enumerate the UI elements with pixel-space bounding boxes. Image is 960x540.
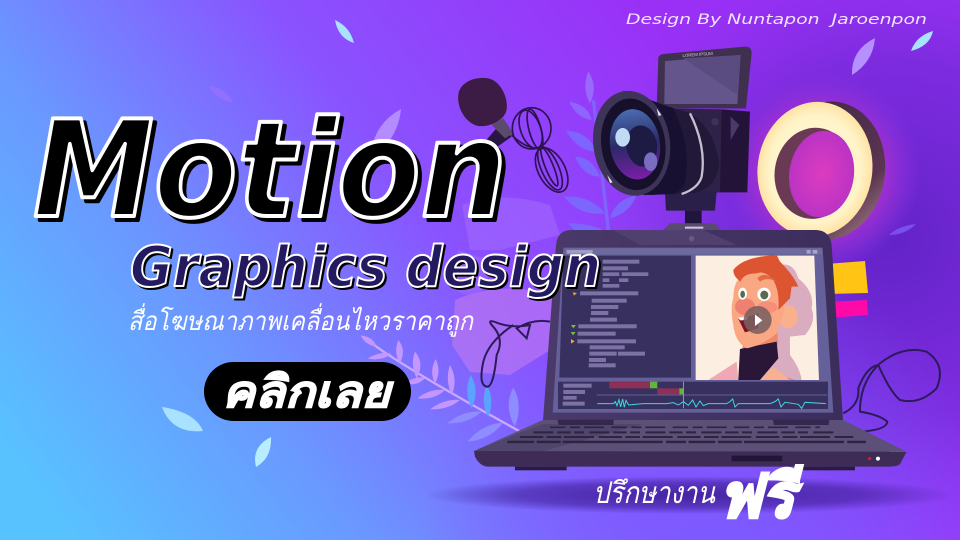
credit line: Design By Nuntapon Jaroenpon	[626, 12, 927, 28]
title: Motion: Motion	[33, 92, 507, 248]
character eyes	[738, 288, 771, 301]
background plant: lower branch	[361, 335, 523, 442]
ring light	[749, 94, 894, 247]
camera flip screen: LOREM IPSUM	[682, 51, 713, 58]
free consultation text: ฟรี	[718, 463, 803, 530]
character shadow	[747, 264, 813, 380]
camera	[586, 47, 752, 230]
laptop screen	[553, 248, 833, 413]
button: คลิกเลย	[222, 368, 395, 417]
title: Graphics design: Graphics design	[130, 235, 601, 300]
character neck	[742, 323, 778, 355]
floating leaves	[162, 20, 933, 467]
button	[204, 362, 411, 421]
lavalier microphone	[458, 78, 575, 197]
laptop deck	[474, 420, 907, 452]
timeline	[558, 382, 828, 409]
character ear	[779, 305, 798, 328]
camera lens	[586, 86, 719, 201]
free consultation text: ปรึกษางาน	[593, 477, 716, 510]
free consultation text	[593, 463, 803, 530]
editor panel	[559, 256, 691, 378]
laptop cable left	[481, 321, 550, 387]
laptop cable right	[843, 350, 940, 432]
ring light glow	[722, 72, 922, 272]
play button	[744, 306, 772, 334]
floor shadow	[425, 476, 955, 514]
subtitle: สื่อโฆษณาภาพเคลื่อนไหวราคาถูก	[128, 303, 474, 337]
character preview panel	[696, 255, 819, 380]
character shirt	[708, 362, 795, 380]
audio waveform	[597, 399, 826, 408]
keyboard	[507, 427, 866, 442]
character face	[732, 271, 785, 348]
character collar	[738, 342, 778, 380]
character hair	[733, 255, 798, 310]
background plant: upright branch	[564, 72, 637, 233]
character mouth	[738, 313, 758, 332]
character illustration	[708, 255, 813, 380]
laptop	[474, 230, 907, 470]
camera flip screen	[657, 47, 752, 108]
character cheeks	[735, 298, 777, 315]
character eyebrow	[757, 275, 777, 282]
camera body	[663, 108, 750, 230]
laptop front edge	[474, 451, 907, 467]
laptop lid	[543, 230, 843, 425]
background plant: monstera leaf	[452, 198, 560, 375]
sticky notes	[826, 261, 868, 318]
